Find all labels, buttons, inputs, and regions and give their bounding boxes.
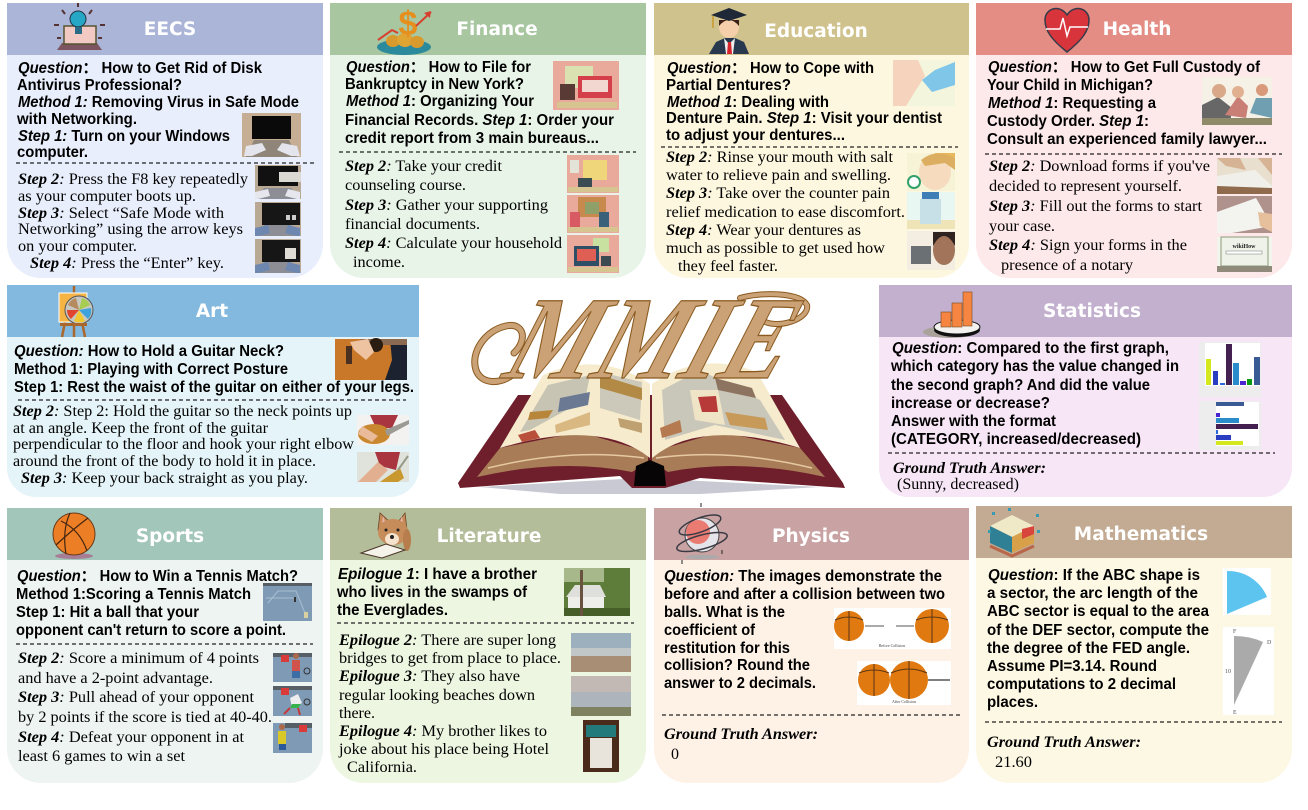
chart: vertical bars — [1199, 342, 1261, 397]
question text block — [345, 59, 614, 147]
header band — [976, 506, 1292, 558]
answer text block — [664, 726, 818, 763]
question text block — [666, 60, 942, 144]
image: house in the Everglades — [564, 568, 630, 616]
image: blue sector — [1223, 568, 1271, 615]
steps text block: Step 3: Keep your back straight as you play. — [21, 470, 308, 487]
question text block: Answer with the format — [891, 413, 1056, 430]
epilogues text block: Epilogue 2: There are super long — [338, 632, 556, 649]
story text block: who lives in the swamps of — [336, 584, 528, 601]
image: Hotel California sign — [583, 720, 619, 772]
question text block: opponent can't return to score a point. — [16, 622, 286, 639]
panel: Health — [976, 3, 1292, 278]
question text block — [987, 567, 1209, 711]
icon: basketball — [53, 513, 95, 559]
panel body — [879, 285, 1292, 497]
steps text block: as your computer boots up. — [18, 188, 196, 205]
panel: EECS — [7, 3, 323, 278]
story text block — [336, 566, 537, 619]
steps text block: financial documents. — [345, 216, 480, 233]
question text block: Step 1: Rest the waist of the guitar on either of your legs. — [14, 379, 414, 396]
heading: Health — [1103, 19, 1171, 40]
right page — [652, 363, 800, 458]
question text block: Partial Dentures? — [666, 77, 791, 94]
question text block — [987, 59, 1267, 148]
panel: Literature — [330, 508, 646, 783]
spine — [634, 460, 666, 486]
question text block: Question: Compared to the first graph, — [892, 340, 1169, 357]
steps text block: Step 3: Pull ahead of your opponent — [18, 689, 255, 706]
image: forms and pen — [1217, 158, 1272, 194]
heading: Sports — [136, 526, 204, 547]
panel body — [7, 3, 323, 278]
heading: EECS — [144, 19, 196, 40]
panel: Mathematics — [976, 506, 1292, 783]
image: family lawyer meeting — [1202, 77, 1272, 125]
question text block: Step 1: Hit a ball that your — [16, 604, 199, 621]
steps text block — [666, 149, 905, 275]
answer text block: (Sunny, decreased) — [897, 476, 1019, 493]
question text block — [16, 60, 299, 161]
icon: dog reading book — [361, 513, 411, 558]
question text block: Method 1: Organizing Your — [346, 93, 534, 110]
question text block: credit report from 3 main bureaus... — [345, 130, 599, 147]
question text block: (CATEGORY, increased/decreased) — [891, 431, 1141, 448]
chart: horizontal bars — [1199, 401, 1261, 450]
steps text block: they feel faster. — [678, 258, 778, 275]
steps text block: Step 4: Defeat your opponent in at — [18, 729, 245, 746]
header band — [330, 508, 646, 560]
steps text block: Step 3: Select “Safe Mode with — [18, 205, 224, 222]
epilogues text block: Epilogue 4: My brother likes to — [338, 723, 547, 740]
question text block: Question： How to Cope with — [667, 60, 874, 77]
steps text block: Step 2: Score a minimum of 4 points — [18, 650, 259, 667]
heading: Art — [196, 301, 228, 322]
question text block: computer. — [17, 144, 88, 161]
image: denture fitting — [893, 60, 955, 106]
image: gray sector DEF: 10 — [1225, 669, 1231, 675]
image: notary page — [1217, 237, 1272, 272]
image: laptop boot — [242, 113, 301, 157]
question text block: Question: If the ABC shape is — [988, 567, 1200, 584]
question text block: Your Child in Michigan? — [987, 77, 1153, 94]
question text block: collision? Round the — [664, 657, 810, 674]
header band — [7, 285, 419, 337]
image: pot and face — [907, 231, 955, 270]
question text block: Custody Order. Step 1: — [987, 113, 1149, 130]
image: filling forms — [1217, 196, 1272, 233]
icon: heart with ECG — [1045, 9, 1089, 52]
panel body — [976, 3, 1292, 278]
heading: Physics — [772, 526, 850, 547]
steps text block: Step 3: Gather your supporting — [345, 197, 548, 214]
heading: Literature — [437, 526, 541, 547]
question text block: Question： How to Win a Tennis Match? — [17, 568, 298, 585]
steps text block: Networking” using the arrow keys — [18, 221, 243, 238]
question text block: before and after a collision between two — [664, 586, 945, 603]
image: desk with records — [553, 61, 619, 110]
steps text block: water to relieve pain and swelling. — [666, 167, 891, 184]
epilogues text block — [338, 632, 561, 776]
steps text block: much as possible to get used how — [666, 240, 885, 257]
question text block: increase or decrease? — [891, 395, 1050, 412]
panel: Statistics — [879, 285, 1292, 497]
steps text block — [13, 403, 354, 487]
image: guitar playing — [357, 415, 409, 445]
steps text block: on your computer. — [18, 238, 137, 255]
panel body — [654, 508, 969, 783]
image: rinse mouth — [907, 153, 955, 191]
question text block: places. — [987, 694, 1038, 711]
story text block: Epilogue 1: I have a brother — [338, 566, 537, 583]
image: after collision — [857, 661, 951, 705]
panel body — [976, 506, 1292, 783]
epilogues text block: California. — [347, 759, 417, 776]
steps text block: perpendicular to the floor and hook your right elbow — [13, 436, 354, 453]
steps text block: Step 2: Take your credit — [345, 158, 503, 175]
epilogues text block: joke about his place being Hotel — [338, 741, 550, 758]
answer text block: 0 — [671, 746, 679, 763]
panel body — [7, 285, 419, 497]
image: step 4 screen — [255, 239, 301, 273]
question text block: Method 1:Scoring a Tennis Match — [16, 586, 251, 603]
image: tennis player green — [273, 686, 312, 716]
epilogues text block: Epilogue 3: They also have — [338, 668, 520, 685]
question text block: a sector, the arc length of the — [987, 585, 1198, 602]
steps text block: Step 3: Fill out the forms to start — [989, 198, 1203, 215]
page block left — [477, 432, 648, 477]
question text block: Question： How to File for — [346, 59, 531, 76]
question text block — [664, 568, 945, 692]
decorative swash: right loop — [740, 294, 807, 324]
panel: Art — [7, 285, 419, 497]
question text block: to adjust your dentures... — [666, 127, 845, 144]
answer text block — [893, 460, 1046, 493]
answer text block: Ground Truth Answer: — [664, 726, 818, 743]
question text block: which category has the value changed in — [890, 358, 1179, 375]
question text block — [890, 340, 1179, 448]
page illustrations — [518, 370, 785, 442]
steps text block: by 2 points if the score is tied at 40-40. — [18, 709, 272, 726]
book shadow — [480, 478, 820, 494]
question text block: Antivirus Professional? — [17, 77, 182, 94]
question text block: Method 1: Removing Virus in Safe Mode — [18, 94, 299, 111]
epilogues text block: regular looking beaches down — [339, 687, 535, 704]
heading: Finance — [456, 19, 538, 40]
question text block: the degree of the FED angle. — [987, 640, 1190, 657]
steps text block: least 6 games to win a set — [18, 748, 186, 765]
image: before collision: Before Collision — [879, 643, 905, 648]
panel body — [7, 508, 323, 783]
question text block — [16, 568, 298, 639]
icon: easel with palette — [59, 286, 93, 337]
question text block: coefficient of — [664, 622, 756, 639]
image: gray sector DEF: D — [1267, 640, 1272, 646]
question text block: Consult an experienced family lawyer... — [987, 131, 1267, 148]
steps text block: Step 2: Download forms if you've — [989, 158, 1210, 175]
panel: Physics — [654, 503, 969, 783]
image: step 3 screen — [255, 202, 301, 236]
question text block: Question： How to Get Full Custody of — [988, 59, 1261, 76]
image: notary page: wikiHow — [1232, 244, 1256, 250]
question text block: Question： How to Get Rid of Disk — [18, 60, 262, 77]
steps text block: income. — [353, 254, 405, 271]
steps text block: Step 4: Sign your forms in the — [989, 237, 1187, 254]
steps text block — [989, 158, 1210, 274]
panel: Sports — [7, 508, 323, 783]
header band — [654, 3, 969, 55]
steps text block: presence of a notary — [1001, 257, 1133, 274]
steps text block — [18, 171, 248, 272]
image: beach — [571, 633, 631, 672]
image: gray sector DEF: F — [1233, 629, 1237, 635]
steps text block: counseling course. — [345, 177, 466, 194]
steps text block: relief medication to ease discomfort. — [666, 204, 905, 221]
panel body — [330, 3, 646, 278]
header band — [330, 3, 646, 55]
steps text block: Step 3: Take over the counter pain — [666, 185, 890, 202]
question text block: balls. What is the — [664, 604, 785, 621]
question text block — [14, 343, 414, 396]
answer text block: Ground Truth Answer: — [987, 734, 1141, 751]
question text block: the second graph? And did the value — [891, 377, 1150, 394]
title: MMIE script lettering: MMIE — [489, 273, 818, 404]
image: tennis player yellow — [273, 723, 312, 753]
panel: Finance — [330, 3, 646, 278]
question text block: with Networking. — [16, 111, 137, 128]
epilogues text block: bridges to get from place to place. — [339, 650, 561, 667]
question text block: Assume PI=3.14. Round — [987, 658, 1157, 675]
heading: Mathematics — [1074, 524, 1208, 545]
image: guitar close-up — [335, 338, 407, 380]
epilogues text block: there. — [339, 705, 375, 722]
steps text block: Step 2: Press the F8 key repeatedly — [18, 171, 248, 188]
question text block: computations to 2 decimal — [987, 676, 1176, 693]
question text block: Bankruptcy in New York? — [345, 76, 524, 93]
question text block: answer to 2 decimals. — [664, 675, 816, 692]
question text block: Step 1: Turn on your Windows — [18, 128, 230, 145]
answer text block: Ground Truth Answer: — [893, 460, 1046, 477]
steps text block: around the front of the body to hold it in place. — [13, 453, 316, 470]
icon: laptop with light bulb — [54, 3, 105, 50]
header band — [7, 3, 323, 55]
image: tennis player red — [273, 653, 312, 682]
question text block: Method 1: Dealing with — [667, 94, 829, 111]
icon: planet with rings — [675, 503, 729, 564]
question text block: ABC sector is equal to the area — [987, 603, 1209, 620]
icon: coins and dollar — [377, 5, 431, 55]
image: calm shore — [571, 676, 631, 716]
image: medication bottle — [907, 192, 955, 229]
header band — [7, 508, 323, 560]
image: financial documents desk — [567, 195, 619, 233]
steps text block: your case. — [989, 218, 1055, 235]
steps text block — [18, 650, 272, 765]
image: household income desk — [567, 235, 619, 273]
steps text block — [345, 158, 562, 271]
icon: number cube — [988, 508, 1040, 556]
question text block: Method 1: Playing with Correct Posture — [14, 361, 288, 378]
header band — [654, 508, 969, 560]
image: step 2 screen — [255, 165, 301, 199]
image: gray sector DEF — [1223, 627, 1274, 716]
image: after collision: After Collision — [892, 699, 916, 704]
header band — [879, 285, 1292, 337]
question text block: Financial Records. Step 1: Order your — [345, 112, 614, 129]
image: before collision — [834, 608, 951, 649]
question text block: Method 1: Requesting a — [988, 95, 1156, 112]
panel body — [654, 3, 969, 278]
question text block: of the DEF sector, compute the — [987, 622, 1209, 639]
steps text block: at an angle. Keep the front of the guitar — [13, 420, 269, 437]
steps text block: and have a 2-point advantage. — [18, 670, 213, 687]
heading: Education — [764, 21, 868, 42]
question text block: Question: The images demonstrate the — [664, 568, 942, 585]
question text block: Question: How to Hold a Guitar Neck? — [14, 343, 284, 360]
page block right — [652, 432, 825, 477]
steps text block: Step 4: Press the “Enter” key. — [30, 255, 224, 272]
steps text block: Step 4: Calculate your household — [345, 235, 562, 252]
image: credit course desk — [567, 155, 619, 193]
answer text block — [987, 734, 1141, 771]
icon: coins and dollar: $ — [399, 5, 418, 43]
logo: MMIE book — [458, 273, 845, 494]
steps text block: decided to represent yourself. — [989, 178, 1182, 195]
answer text block: 21.60 — [995, 754, 1032, 771]
icon: graduate — [709, 8, 749, 54]
header band — [976, 3, 1292, 55]
question text block: restitution for this — [664, 640, 790, 657]
steps text block: Step 2: Step 2: Hold the guitar so the neck points up — [13, 403, 352, 420]
story text block: the Everglades. — [337, 602, 448, 619]
panel body — [330, 508, 646, 783]
icon: bar chart on disc — [923, 292, 980, 338]
image: gray sector DEF: E — [1233, 710, 1237, 716]
steps text block: Step 4: Wear your dentures as — [666, 222, 861, 239]
image: guitar posture — [357, 452, 409, 482]
question text block: Denture Pain. Step 1: Visit your dentist — [666, 110, 942, 127]
left page — [500, 364, 650, 458]
image: tennis court — [263, 583, 312, 621]
steps text block: Step 2: Rinse your mouth with salt — [666, 149, 894, 166]
heading: Statistics — [1043, 301, 1141, 322]
panel: Education — [654, 3, 969, 278]
decorative swash: left loop — [475, 325, 522, 382]
book cover — [458, 395, 845, 488]
